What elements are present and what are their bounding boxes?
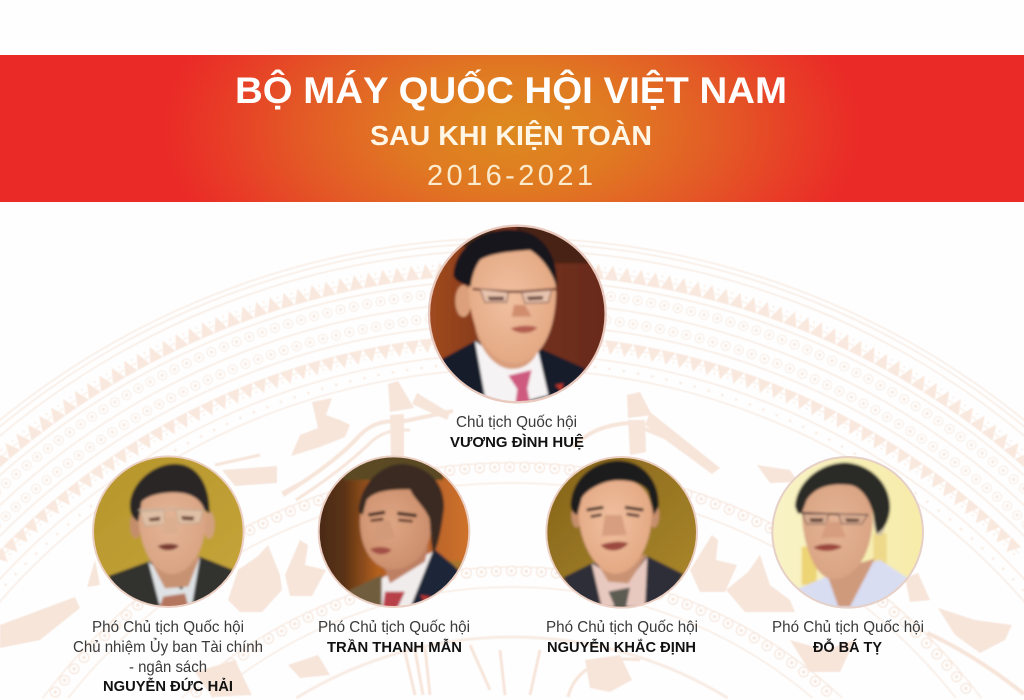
title banner bbox=[0, 55, 1024, 202]
portrait: Vương Đình Huệ bbox=[427, 223, 607, 408]
caption: Nguyễn Khắc Định bbox=[546, 619, 698, 656]
portrait: Nguyễn Đức Hải bbox=[92, 455, 245, 608]
portrait: Đỗ Bá Tỵ bbox=[770, 455, 927, 610]
caption: Nguyễn Đức Hải bbox=[73, 619, 263, 695]
background bronze drum pattern bbox=[0, 238, 1024, 699]
name: VƯƠNG ĐÌNH HUỆ bbox=[450, 433, 584, 451]
name: NGUYỄN ĐỨC HẢI bbox=[103, 677, 233, 695]
committee line 2: - ngân sách bbox=[129, 659, 207, 676]
name: ĐỖ BÁ TỴ bbox=[813, 638, 882, 656]
committee line 1: Chủ nhiệm Ủy ban Tài chính bbox=[73, 638, 263, 656]
caption: Trần Thanh Mẫn bbox=[318, 619, 470, 656]
name: TRẦN THANH MẪN bbox=[327, 639, 462, 656]
caption: chairman bbox=[450, 414, 584, 451]
caption: Đỗ Bá Tỵ bbox=[772, 619, 924, 656]
role: Phó Chủ tịch Quốc hội bbox=[318, 619, 470, 636]
portrait: Trần Thanh Mẫn bbox=[318, 456, 470, 608]
title: BỘ MÁY QUỐC HỘI VIỆT NAM bbox=[235, 69, 787, 111]
portrait: Nguyễn Khắc Định bbox=[543, 455, 700, 610]
role: Chủ tịch Quốc hội bbox=[456, 414, 577, 431]
subtitle: SAU KHI KIỆN TOÀN bbox=[370, 120, 652, 151]
role: Phó Chủ tịch Quốc hội bbox=[92, 619, 244, 636]
portraits: Nguyễn Khắc Định and Đỗ Bá Tỵ bbox=[543, 455, 927, 610]
term years: 2016-2021 bbox=[427, 160, 593, 192]
role: Phó Chủ tịch Quốc hội bbox=[546, 619, 698, 636]
name: NGUYỄN KHẮC ĐỊNH bbox=[547, 638, 696, 656]
role: Phó Chủ tịch Quốc hội bbox=[772, 619, 924, 636]
